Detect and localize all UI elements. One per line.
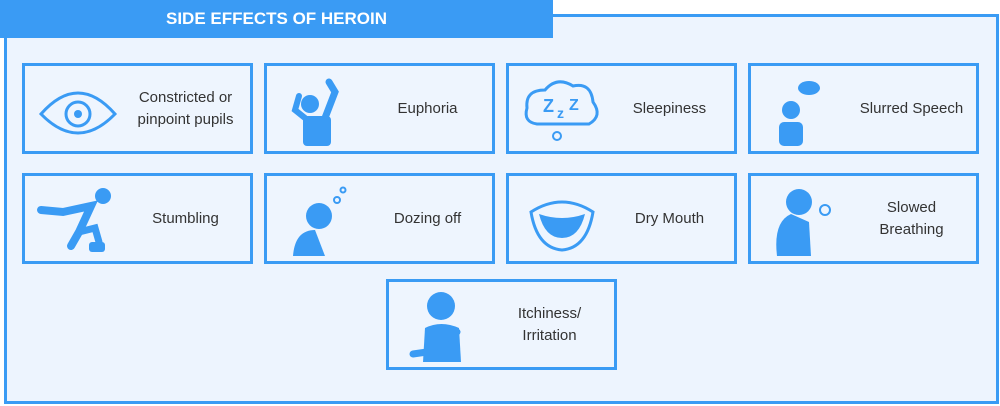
icon: eye (39, 92, 117, 134)
title tab: SIDE EFFECTS OF HEROIN (166, 9, 387, 28)
card: euphoria: Euphoria (397, 100, 458, 116)
card: stumbling (22, 173, 253, 264)
card: sleepiness (506, 63, 737, 154)
card: slurred speech: Slurred Speech (860, 100, 963, 116)
icon: yawning person (293, 186, 346, 256)
icon: stumbling person (37, 188, 111, 252)
icon: cloud zzz: Z (569, 97, 579, 114)
title tab (0, 0, 553, 38)
card: stumbling: Stumbling (152, 210, 219, 226)
card: dozing off: Dozing off (394, 210, 461, 226)
card: dry mouth (506, 173, 737, 264)
card: itchiness: Irritation (522, 326, 577, 344)
icon: cloud zzz: Z (543, 96, 554, 116)
card: pupils: pinpoint pupils (138, 110, 233, 128)
card: euphoria (264, 63, 495, 154)
icon: cloud zzz (524, 80, 599, 141)
icon: speaking person (779, 81, 820, 146)
card: slowed breathing: Slowed (887, 198, 936, 216)
card: slowed breathing: Breathing (879, 220, 944, 238)
icon: euphoria person (292, 78, 339, 146)
card: dozing off (264, 173, 495, 264)
card: itchiness: Itchiness/ (518, 304, 581, 322)
icon: scratching person (410, 292, 461, 362)
card: slurred speech (748, 63, 979, 154)
icon: breathing person (776, 189, 831, 256)
card: pupils: Constricted or (139, 88, 232, 106)
card: slowed breathing (748, 173, 979, 264)
icon: mouth (529, 200, 595, 252)
card: sleepiness: Sleepiness (633, 100, 706, 116)
card: dry mouth: Dry Mouth (635, 210, 704, 226)
icon: cloud zzz: z (557, 105, 564, 121)
card: pupils (22, 63, 253, 154)
card: itchiness (386, 279, 617, 370)
